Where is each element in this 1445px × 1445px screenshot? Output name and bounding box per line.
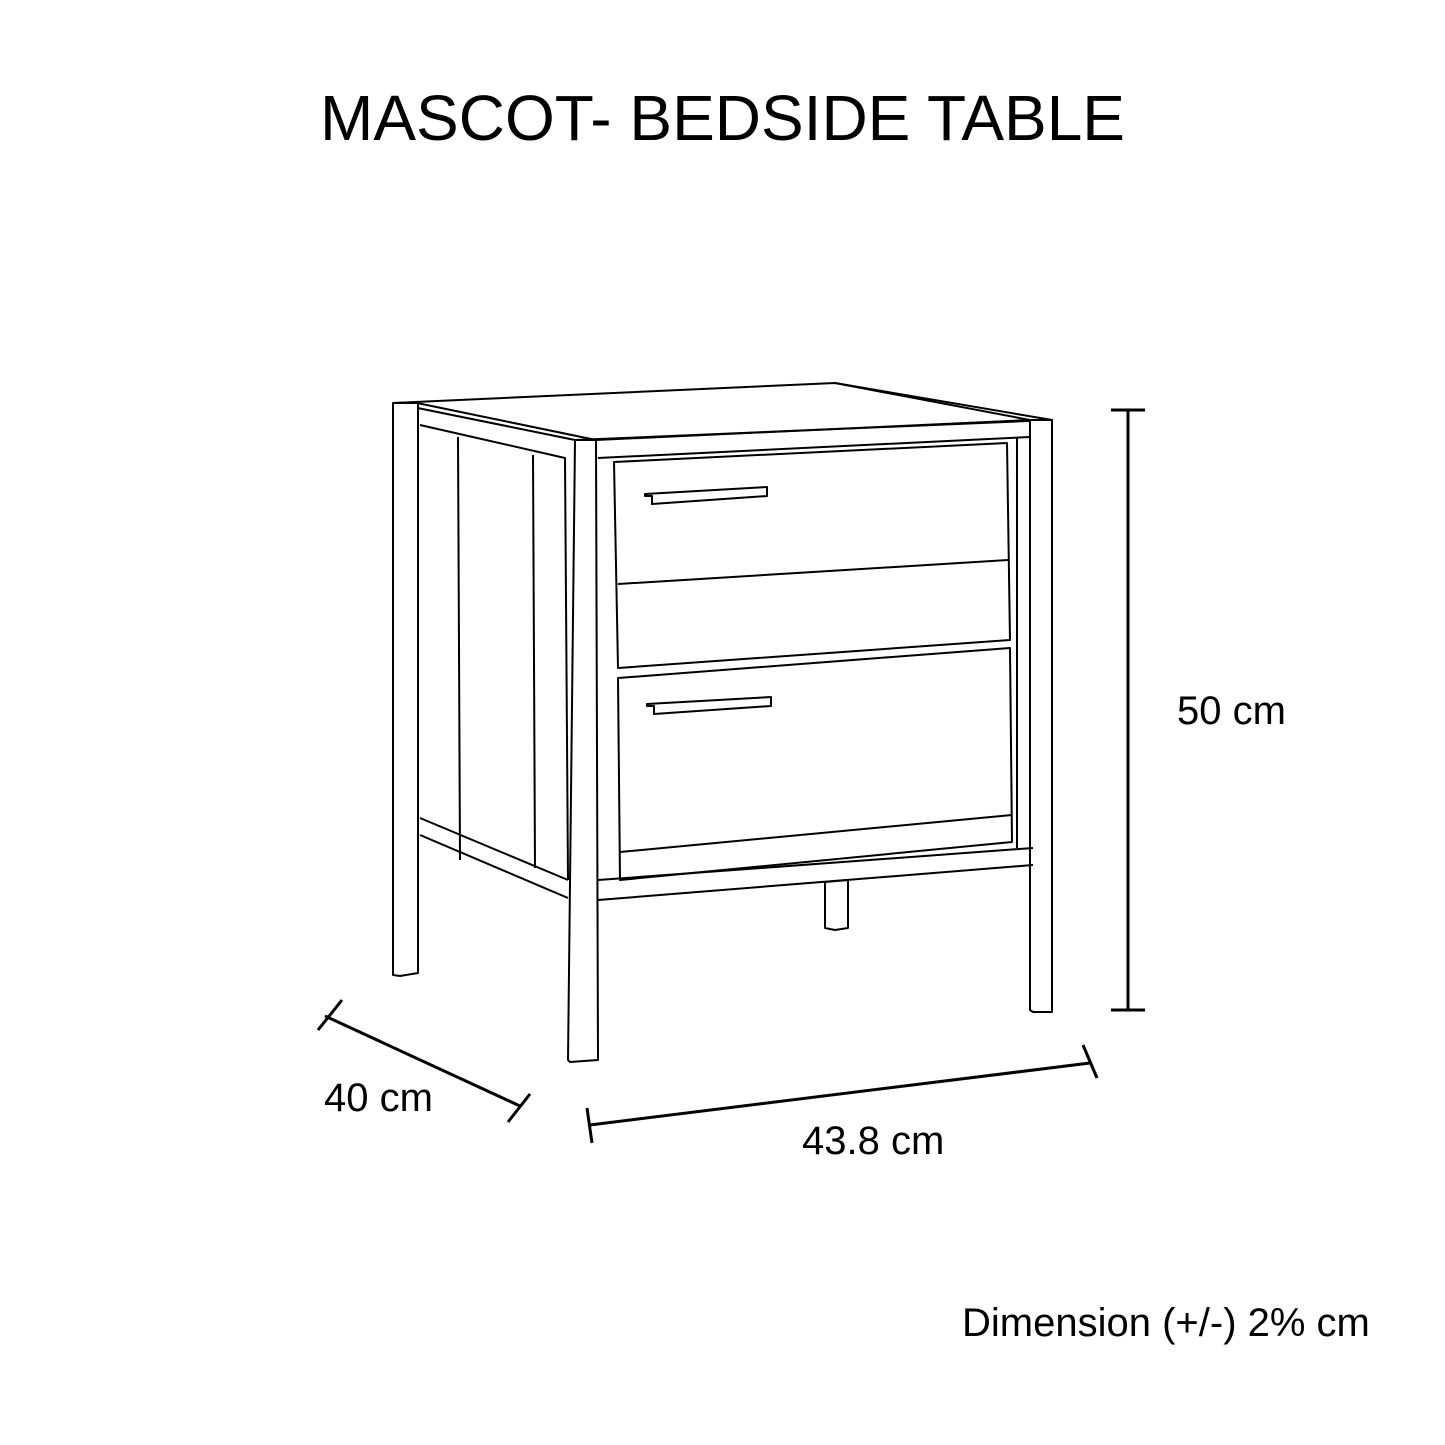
side panel bbox=[420, 425, 568, 898]
top drawer bbox=[614, 443, 1010, 668]
legs bbox=[393, 403, 1052, 1062]
label: depth: 40 cm bbox=[324, 1076, 433, 1120]
bottom drawer bbox=[618, 648, 1012, 880]
footnote: Dimension (+/-) 2% cm bbox=[962, 1301, 1370, 1345]
front frame bbox=[598, 437, 1033, 900]
title: MASCOT- BEDSIDE TABLE bbox=[320, 82, 1125, 154]
label: height: 50 cm bbox=[1177, 689, 1286, 733]
table top bbox=[393, 383, 1052, 440]
label: width: 43.8 cm bbox=[802, 1119, 944, 1163]
